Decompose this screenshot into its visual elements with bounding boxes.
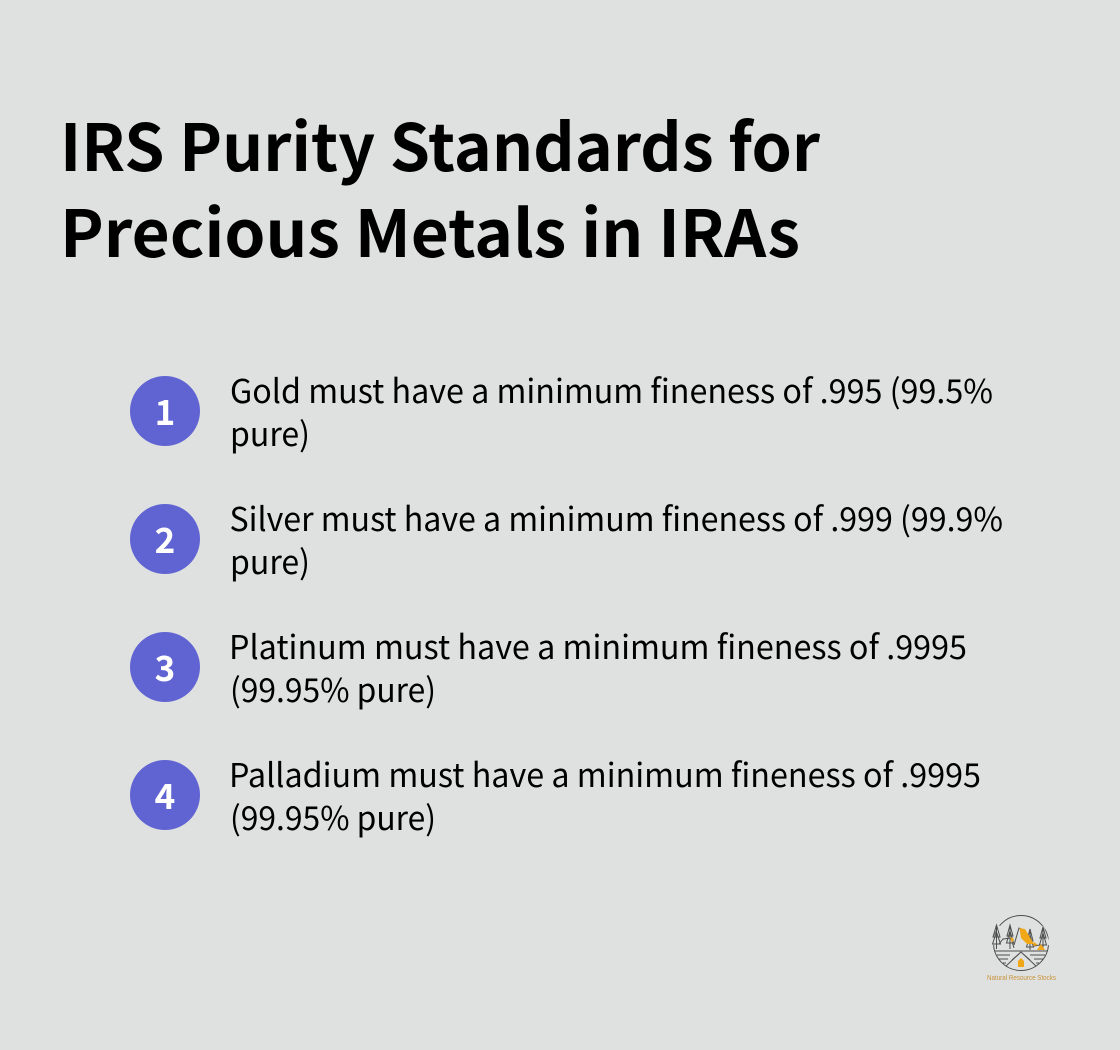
list item 3: platinum	[130, 621, 967, 712]
text: palladium fineness: (99.95% pure)	[230, 792, 436, 840]
title	[60, 96, 821, 276]
text: silver fineness: Silver must have a minimum fineness of .999 (99.9%	[230, 493, 1003, 541]
number badge 2: 2	[155, 513, 175, 564]
number badge 4	[130, 760, 200, 830]
text: palladium fineness: Palladium must have a minimum fineness of .9995	[229, 749, 981, 797]
list item 4: palladium	[130, 749, 981, 840]
logo: Natural Resource Stocks	[987, 916, 1056, 982]
title: IRS Purity Standards for	[60, 96, 821, 190]
number badge 1	[130, 376, 200, 446]
number badge 2	[130, 504, 200, 574]
number badge 1: 1	[155, 385, 175, 436]
logo emblem	[992, 916, 1049, 970]
number badge 4: 4	[155, 769, 175, 820]
text: gold fineness	[230, 365, 993, 456]
text: platinum fineness	[229, 621, 967, 712]
text: gold fineness: pure)	[230, 408, 310, 456]
text: gold fineness: Gold must have a minimum fineness of .995 (99.5%	[230, 365, 993, 413]
text: platinum fineness: (99.95% pure)	[230, 664, 436, 712]
number badge 3: 3	[155, 641, 175, 692]
text: silver fineness	[230, 493, 1003, 584]
list item 2: silver	[130, 493, 1003, 584]
list item 1: gold	[130, 365, 993, 456]
text: silver fineness: pure)	[230, 536, 310, 584]
logo wordmark: Natural Resource Stocks	[987, 975, 1056, 982]
title: Precious Metals in IRAs	[60, 182, 800, 276]
text: platinum fineness: Platinum must have a minimum fineness of .9995	[229, 621, 967, 669]
text: palladium fineness	[229, 749, 981, 840]
number badge 3	[130, 632, 200, 702]
